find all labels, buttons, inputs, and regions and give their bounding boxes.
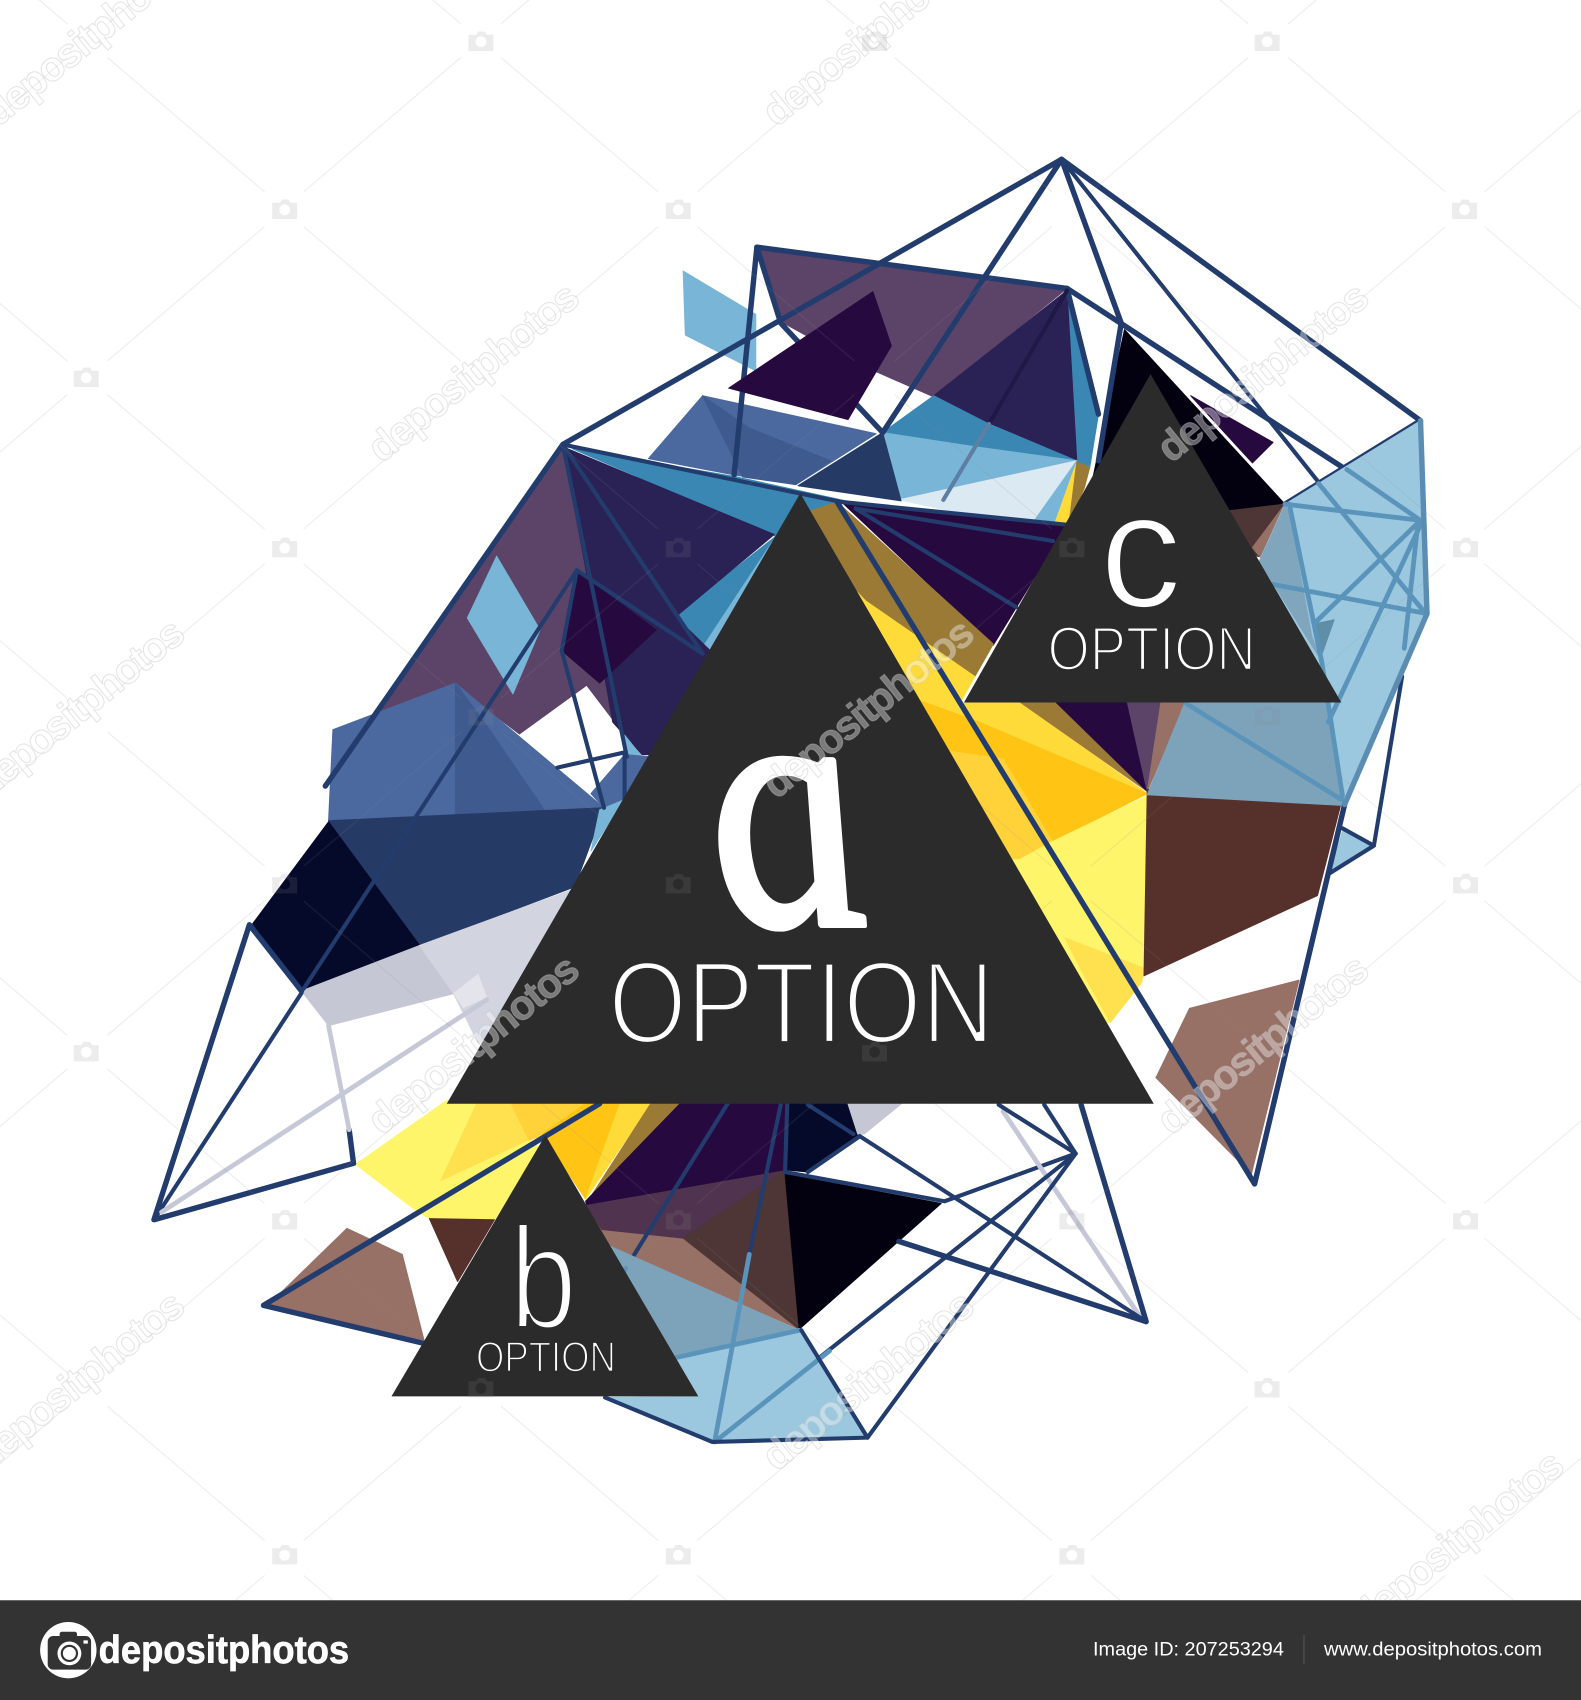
triangle: option a [447,493,1154,1104]
wireframe lines [154,159,1421,1438]
centre fan and yellow facets [808,501,1186,1022]
dark chunk over wire [729,292,891,420]
upper centre facets [759,250,1098,523]
watermark text and camera marks: depositphotos [358,945,588,1143]
letter a: a [655,611,902,1001]
watermark text and camera marks: depositphotos [1148,945,1377,1143]
logo wordmark: depositphotos [99,1629,349,1672]
image id: Image ID: 207253294 [1093,1639,1284,1661]
upper left facets [374,271,876,808]
website: www.depositphotos.com [1323,1639,1542,1661]
watermark text and camera marks: depositphotos [358,273,588,471]
letter c: c [1100,458,1182,642]
footer bar [0,1600,1581,1700]
faceted polygon cluster [253,250,1374,1340]
lower centre facets [269,1100,941,1340]
watermark text and camera marks: depositphotos [753,1281,983,1479]
watermark text and camera marks: depositphotos [1148,273,1377,471]
left facets [253,683,624,1043]
lower yellow facets [356,1100,683,1220]
letter b: b [510,1196,577,1359]
triangle: option b [391,1135,698,1396]
icon: camera logo [40,1622,97,1678]
triangle: option c [964,374,1341,703]
label OPTION: OPTION [476,1333,616,1380]
translucent light blue facets [602,421,1427,1442]
watermark text and camera marks: depositphotos [753,609,983,807]
watermark text and camera marks: depositphotos [1343,1441,1573,1639]
label OPTION: OPTION [1047,615,1256,684]
right facets [1093,330,1374,1174]
label OPTION: OPTION [608,937,994,1068]
